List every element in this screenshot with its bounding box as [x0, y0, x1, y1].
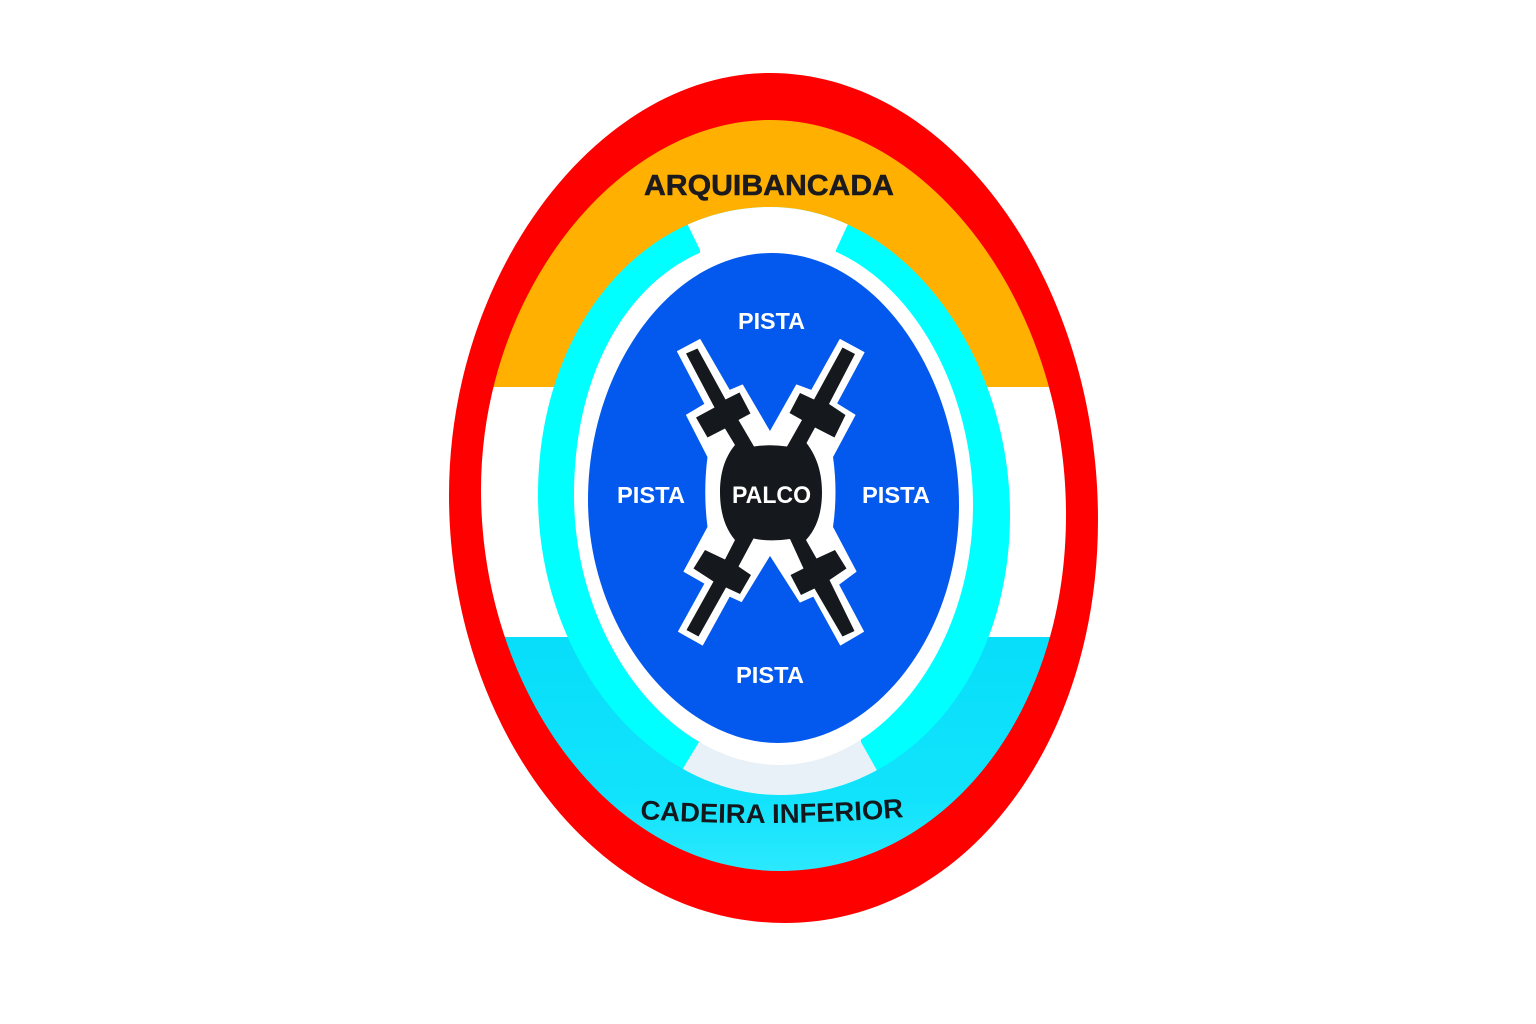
cyan ring fill [530, 200, 1020, 800]
label: pista bottom: PISTA [736, 662, 804, 688]
label: pista top: PISTA [738, 308, 805, 334]
stage white outline [678, 340, 864, 645]
bottom gap [682, 740, 877, 795]
label: palco: PALCO [732, 482, 811, 509]
label: arquibancada: ARQUIBANCADA [644, 170, 894, 202]
label: pista right: PISTA [862, 482, 930, 508]
venue seating map [449, 73, 1098, 923]
label: cadeira inferior: CADEIRA INFERIOR [642, 799, 904, 823]
sector: white middle [470, 387, 1080, 637]
stage: palco with catwalks [678, 340, 864, 645]
inner white border [574, 238, 973, 765]
top gap [688, 207, 848, 253]
outer red ring [449, 73, 1098, 923]
pista blue field [588, 253, 959, 743]
label: pista left: PISTA [617, 482, 685, 508]
seating band sectors [470, 110, 1080, 877]
sector: cadeira inferior [504, 637, 1050, 871]
stage black shape [686, 348, 855, 636]
sector: arquibancada [494, 120, 1049, 387]
cyan ring with gaps [530, 190, 1020, 810]
